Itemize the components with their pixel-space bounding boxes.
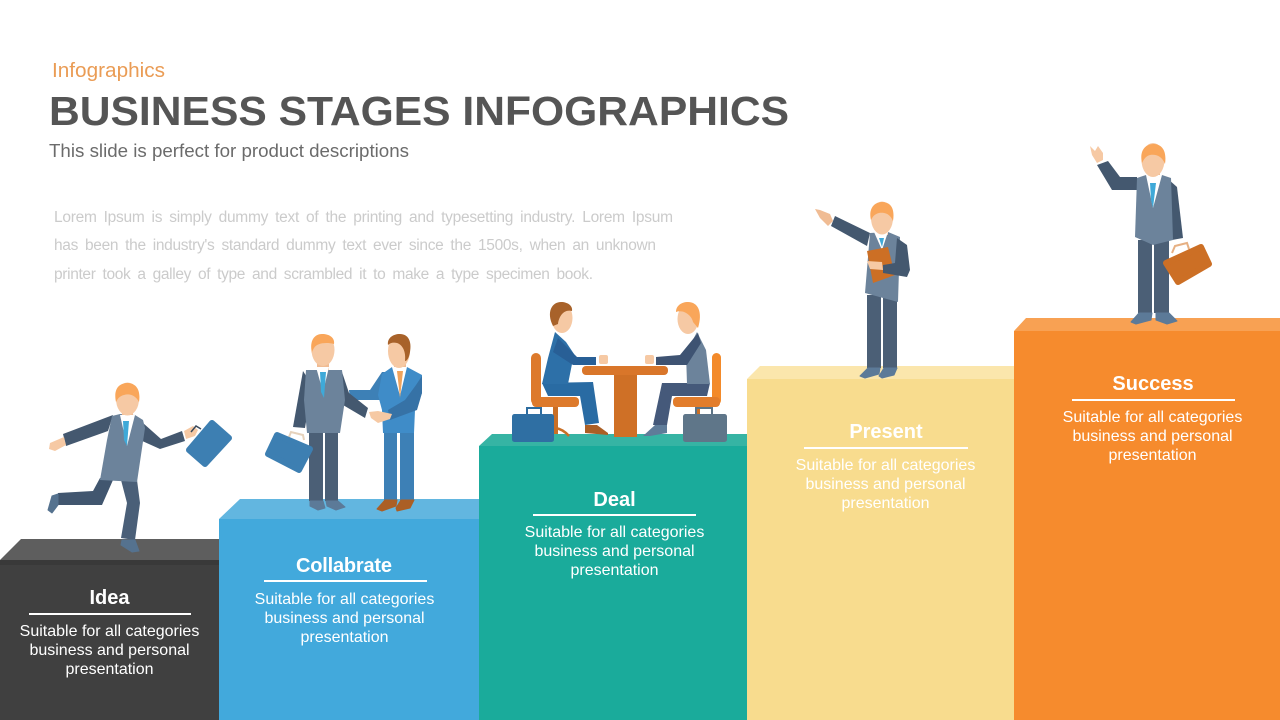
figure: successful man with orange briefcase (1090, 143, 1209, 324)
panel: Present step: Suitable for all categories (796, 457, 975, 474)
title: BUSINESS STAGES INFOGRAPHICS (49, 88, 789, 134)
intro text block: Lorem Ipsum is simply dummy text of the printing and typesetting industry. Lorem Ipsum (54, 209, 673, 226)
subtitle: This slide is perfect for product descriptions (49, 140, 409, 161)
panel: Idea step: presentation (65, 661, 154, 678)
panel: Deal step: Deal (593, 489, 636, 511)
figure: two men meeting at table (512, 302, 727, 442)
panel: Success step: Success (1112, 373, 1194, 395)
panel: Idea step (0, 539, 219, 720)
panel: Success step: business and personal (1072, 428, 1233, 445)
panel: Collabrate step: business and personal (264, 610, 425, 627)
panel: Collabrate step (219, 499, 479, 720)
panel: Idea step: Idea (89, 587, 130, 609)
panel: Present step (747, 366, 1014, 720)
panel: Success step (1014, 318, 1280, 720)
briefcases (512, 408, 727, 442)
figure: presenter pointing (815, 202, 910, 378)
panel: Present step: Present (849, 421, 923, 443)
figure: running man with briefcase (48, 382, 229, 552)
panel: Deal step: Suitable for all categories (525, 524, 704, 541)
intro text block: has been the industry's standard dummy text ever since the 1500s, when an unknown (54, 237, 656, 254)
panel: Present step: business and personal (805, 476, 966, 493)
panel: Success step: Suitable for all categories (1063, 409, 1242, 426)
intro text block: printer took a galley of type and scrambled it to make a type specimen book. (54, 266, 593, 283)
eyebrow: Infographics: Infographics (52, 60, 165, 82)
panel: Success step: presentation (1108, 447, 1197, 464)
panel: Deal step: presentation (570, 562, 659, 579)
panel: Present step: presentation (841, 495, 930, 512)
figure: two men shaking hands (268, 334, 422, 511)
panel: Idea step: Suitable for all categories (20, 623, 199, 640)
chairs (531, 353, 721, 436)
panel: Deal step (479, 434, 747, 720)
panel: Collabrate step: Suitable for all categories (255, 591, 434, 608)
intro text block (54, 209, 673, 283)
panel: Idea step: business and personal (29, 642, 190, 659)
panel: Collabrate step: Collabrate (296, 555, 392, 577)
panel: Deal step: business and personal (534, 543, 695, 560)
panel: Collabrate step: presentation (300, 629, 389, 646)
